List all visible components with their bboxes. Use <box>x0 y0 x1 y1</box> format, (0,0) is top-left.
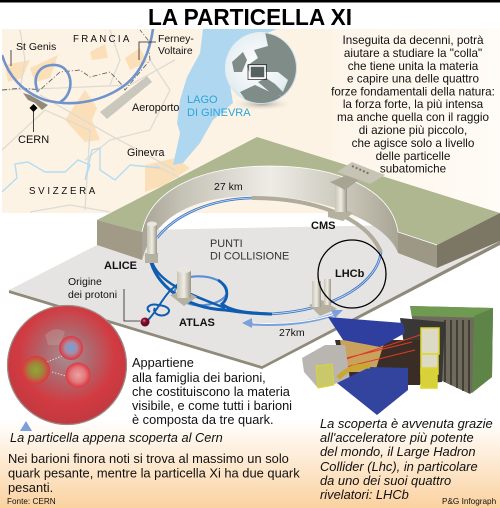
panel: location map <box>2 29 332 213</box>
detector: dark stack <box>400 318 445 385</box>
text block: LHC discovery: all'acceleratore più potente <box>320 430 474 445</box>
tunnel wall <box>142 166 398 260</box>
label: 27 km top: 27 km <box>214 181 243 193</box>
text block: intro: e capire una delle quattro <box>347 72 479 86</box>
text block: family of baryons: che costituiscono la materia <box>132 384 291 399</box>
label: Punti di collisione: PUNTI <box>210 238 243 250</box>
label: Punti di collisione: DI COLLISIONE <box>210 250 289 262</box>
label: Aeroporto: Aeroporto <box>132 102 179 114</box>
text block: intro: delle particelle <box>376 150 450 163</box>
source credit: Fonte: CERN <box>7 497 56 506</box>
quark: pink <box>66 362 90 388</box>
text block: intro: Inseguita da decenni, potrà <box>342 34 484 47</box>
wall left front <box>97 220 142 260</box>
detector: blue magnet bottom <box>337 367 408 415</box>
wall right side <box>437 213 500 268</box>
text block: intro: che agisce solo a livello <box>352 137 475 150</box>
text block: LHC discovery: La scoperta è avvenuta grazie <box>320 416 493 431</box>
text block: family of baryons: è composta da tre quark. <box>132 412 274 427</box>
beam line thick <box>150 258 272 314</box>
label: Svizzera: SVIZZERA <box>29 186 98 197</box>
floor plate edge <box>9 241 500 369</box>
quark: blue <box>59 336 83 360</box>
text block: intro: che tiene unita la materia <box>348 60 479 73</box>
text block: intro: subatomiche <box>380 162 446 176</box>
map: SPS ring <box>36 65 70 102</box>
detector: core <box>335 340 420 385</box>
quark: green <box>22 356 50 384</box>
wall right front <box>398 232 437 268</box>
label: Lago di Ginevra: LAGO <box>187 94 218 106</box>
detector: blue magnet top <box>328 317 405 347</box>
title: LA PARTICELLA XI <box>148 4 352 30</box>
label: Ferney-Voltaire: Ferney- <box>158 34 194 45</box>
label: 27km bottom: 27km <box>279 327 305 339</box>
label: Origine dei protoni: dei protoni <box>68 289 117 301</box>
text block: LHC discovery: Collider (Lhc), in particolare <box>320 459 478 474</box>
detector: muon panel body <box>410 306 493 394</box>
label: Ginevra: Ginevra <box>127 147 164 159</box>
text block: intro: aiutare a studiare la "colla" <box>344 47 482 60</box>
label: Origine dei protoni: Origine <box>68 276 102 288</box>
arrow: 27km double arrow <box>242 310 343 328</box>
illustration: LHCb detector <box>302 306 493 415</box>
map: river <box>2 148 160 192</box>
tunnel section <box>252 198 381 252</box>
label: ATLAS: ATLAS <box>179 317 215 329</box>
text block: heavy quarks: Nei barioni finora noti si trova al massimo un solo <box>8 451 289 466</box>
text block: intro: forze fondamentali della natura: <box>331 86 495 98</box>
panel: LHC 3D diagram <box>9 137 500 369</box>
detector: panel stripes <box>445 320 469 393</box>
text block: intro: ma anche quella con il raggio <box>337 111 490 124</box>
map: St Genis leader <box>10 50 12 66</box>
text block: intro <box>331 34 495 176</box>
map: roads <box>2 30 180 212</box>
icon: locator globe <box>225 32 300 111</box>
caption: particle: La particella appena scoperta al Cern <box>10 430 223 445</box>
text block: LHC discovery: del mondo, il Large Hadron <box>320 444 476 459</box>
map: Lake Geneva <box>173 29 277 165</box>
text block: heavy quarks: quark pesante, mentre la particella Xi ha due quark <box>8 466 300 480</box>
LHC ring thin <box>157 198 381 314</box>
label: ALICE: ALICE <box>104 260 137 272</box>
map: urban areas <box>5 44 190 192</box>
text block: heavy quarks: pesanti. <box>8 480 53 495</box>
LHCb circle highlight <box>318 240 386 308</box>
tower: LHCb <box>309 279 337 316</box>
proton injection line <box>148 282 182 320</box>
text block: family of baryons: visibile, e come tutti i barioni <box>132 398 292 413</box>
text block: family of baryons: alla famiglia dei barioni, <box>132 370 266 385</box>
text block: LHC discovery: da uno dei suoi quattro <box>320 473 451 488</box>
graphic credit: P&G Infograph <box>442 497 497 506</box>
tower: CMS <box>328 162 385 221</box>
label: St Genis: St Genis <box>16 41 56 53</box>
map: CERN marker <box>30 104 38 132</box>
text block: intro: la forza forte, la più intensa <box>343 98 484 111</box>
tower: ATLAS <box>170 267 197 306</box>
detector: left module <box>302 345 350 388</box>
map: border <box>2 30 150 90</box>
tower: ALICE <box>145 222 158 263</box>
text block: family of baryons: Appartiene <box>132 355 194 370</box>
icon: blue triangle pointer <box>20 421 32 431</box>
detector: yellow frames <box>421 328 439 388</box>
origin leader <box>124 289 140 321</box>
label: CMS: CMS <box>311 220 335 232</box>
label: Lago di Ginevra: DI GINEVRA <box>187 107 251 119</box>
detector: green side <box>472 308 493 393</box>
SPS ring <box>175 276 227 305</box>
map: airport runway <box>100 76 152 119</box>
label: CERN: CERN <box>18 134 49 146</box>
origin marker: red dot <box>140 318 150 326</box>
detector: gold coil <box>338 366 370 378</box>
text block: intro: di azione più piccolo, <box>359 124 467 137</box>
text block: LHC discovery: rivelatori: LHCb <box>320 487 409 502</box>
detector: green top band <box>410 306 493 318</box>
map: Ferney leader <box>139 42 156 60</box>
map: LHC ring <box>2 29 153 103</box>
label: Ferney-Voltaire: Voltaire <box>158 46 193 57</box>
floor plate <box>9 225 500 366</box>
label: Francia: FRANCIA <box>73 34 132 45</box>
map: CERN site <box>23 93 48 110</box>
illustration: Xi particle sphere <box>7 305 127 425</box>
green block top <box>97 137 500 245</box>
label: LHCb: LHCb <box>335 268 365 280</box>
